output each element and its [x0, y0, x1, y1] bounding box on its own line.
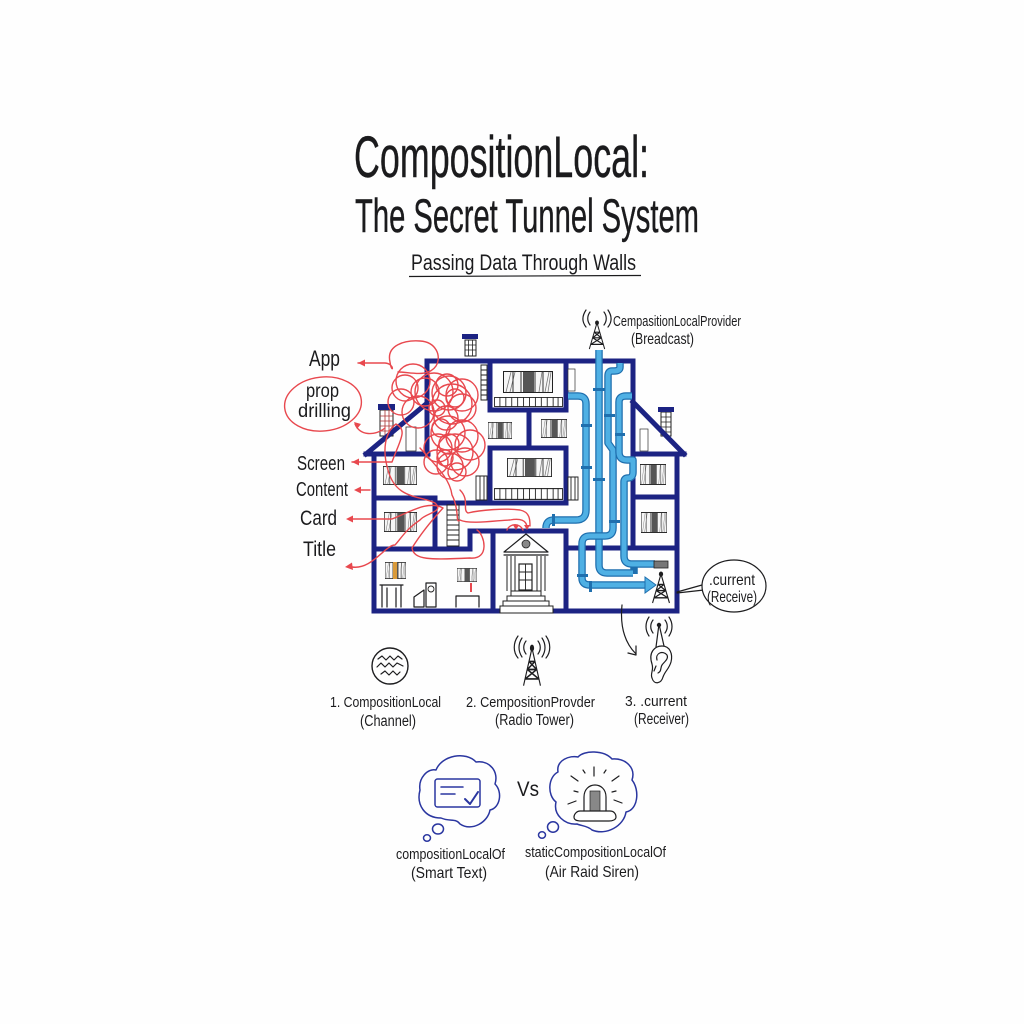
windows	[383, 369, 667, 582]
current receive speech bubble	[677, 560, 766, 612]
label: CompositionProvider: 2. CempositionProvder	[466, 694, 595, 711]
label: CompositionProvider	[466, 694, 595, 729]
prop drilling callout: drilling	[298, 401, 351, 422]
broadcast tower icon	[583, 310, 611, 349]
walls	[366, 361, 684, 611]
house cutaway	[345, 334, 684, 613]
label: CompositionLocal	[330, 694, 441, 730]
current receive speech bubble: .current	[709, 572, 755, 589]
label: compositionLocalOf: compositionLocalOf	[396, 846, 506, 863]
provider label: (Breadcast)	[631, 331, 694, 348]
provider label: CempasitionLocalProvider	[613, 313, 741, 330]
left component labels	[296, 346, 348, 561]
icon: radio tower	[514, 636, 550, 686]
current receive speech bubble: (Receive)	[707, 589, 757, 606]
blue tunnel pipes	[546, 350, 668, 593]
chimneys	[378, 334, 674, 436]
label: CompositionLocal: 1. CompositionLocal	[330, 694, 441, 711]
left component labels: App	[309, 346, 340, 371]
prop drilling callout	[282, 373, 364, 435]
left component labels: Screen	[297, 453, 345, 475]
provider label	[613, 313, 741, 348]
icon: channel waves	[372, 648, 408, 684]
curved arrow to ear	[622, 605, 636, 655]
label: current: (Receiver)	[634, 711, 689, 728]
left component labels: Title	[303, 538, 336, 561]
label: staticCompositionLocalOf: (Air Raid Siren)	[545, 864, 639, 881]
icon: ear with antenna	[646, 617, 672, 683]
title: CompositionLocal:	[354, 125, 649, 190]
label: staticCompositionLocalOf	[525, 844, 667, 881]
label: CompositionLocal: (Channel)	[360, 713, 416, 730]
title: The Secret Tunnel System	[355, 189, 699, 242]
label: staticCompositionLocalOf: staticCompositionLocalOf	[525, 844, 667, 861]
thought cloud: smart text	[419, 756, 500, 841]
tangled red prop drilling wires	[345, 341, 530, 570]
balconies and stairs	[447, 365, 578, 546]
furniture	[380, 583, 479, 607]
label: current	[625, 693, 689, 728]
left component labels: Card	[300, 507, 337, 530]
label: current: 3. .current	[625, 693, 688, 710]
label: compositionLocalOf: (Smart Text)	[411, 865, 487, 882]
thought cloud: air raid siren	[538, 752, 637, 838]
vs label: Vs	[517, 778, 539, 801]
label: compositionLocalOf	[396, 846, 506, 882]
subtitle: Passing Data Through Walls	[411, 250, 636, 275]
label: CompositionProvider: (Radio Tower)	[495, 712, 574, 729]
left component labels: Content	[296, 479, 348, 501]
title	[354, 125, 699, 242]
front door temple	[500, 534, 553, 613]
prop drilling callout: prop	[306, 381, 339, 402]
receiver tower inside house	[653, 572, 669, 603]
